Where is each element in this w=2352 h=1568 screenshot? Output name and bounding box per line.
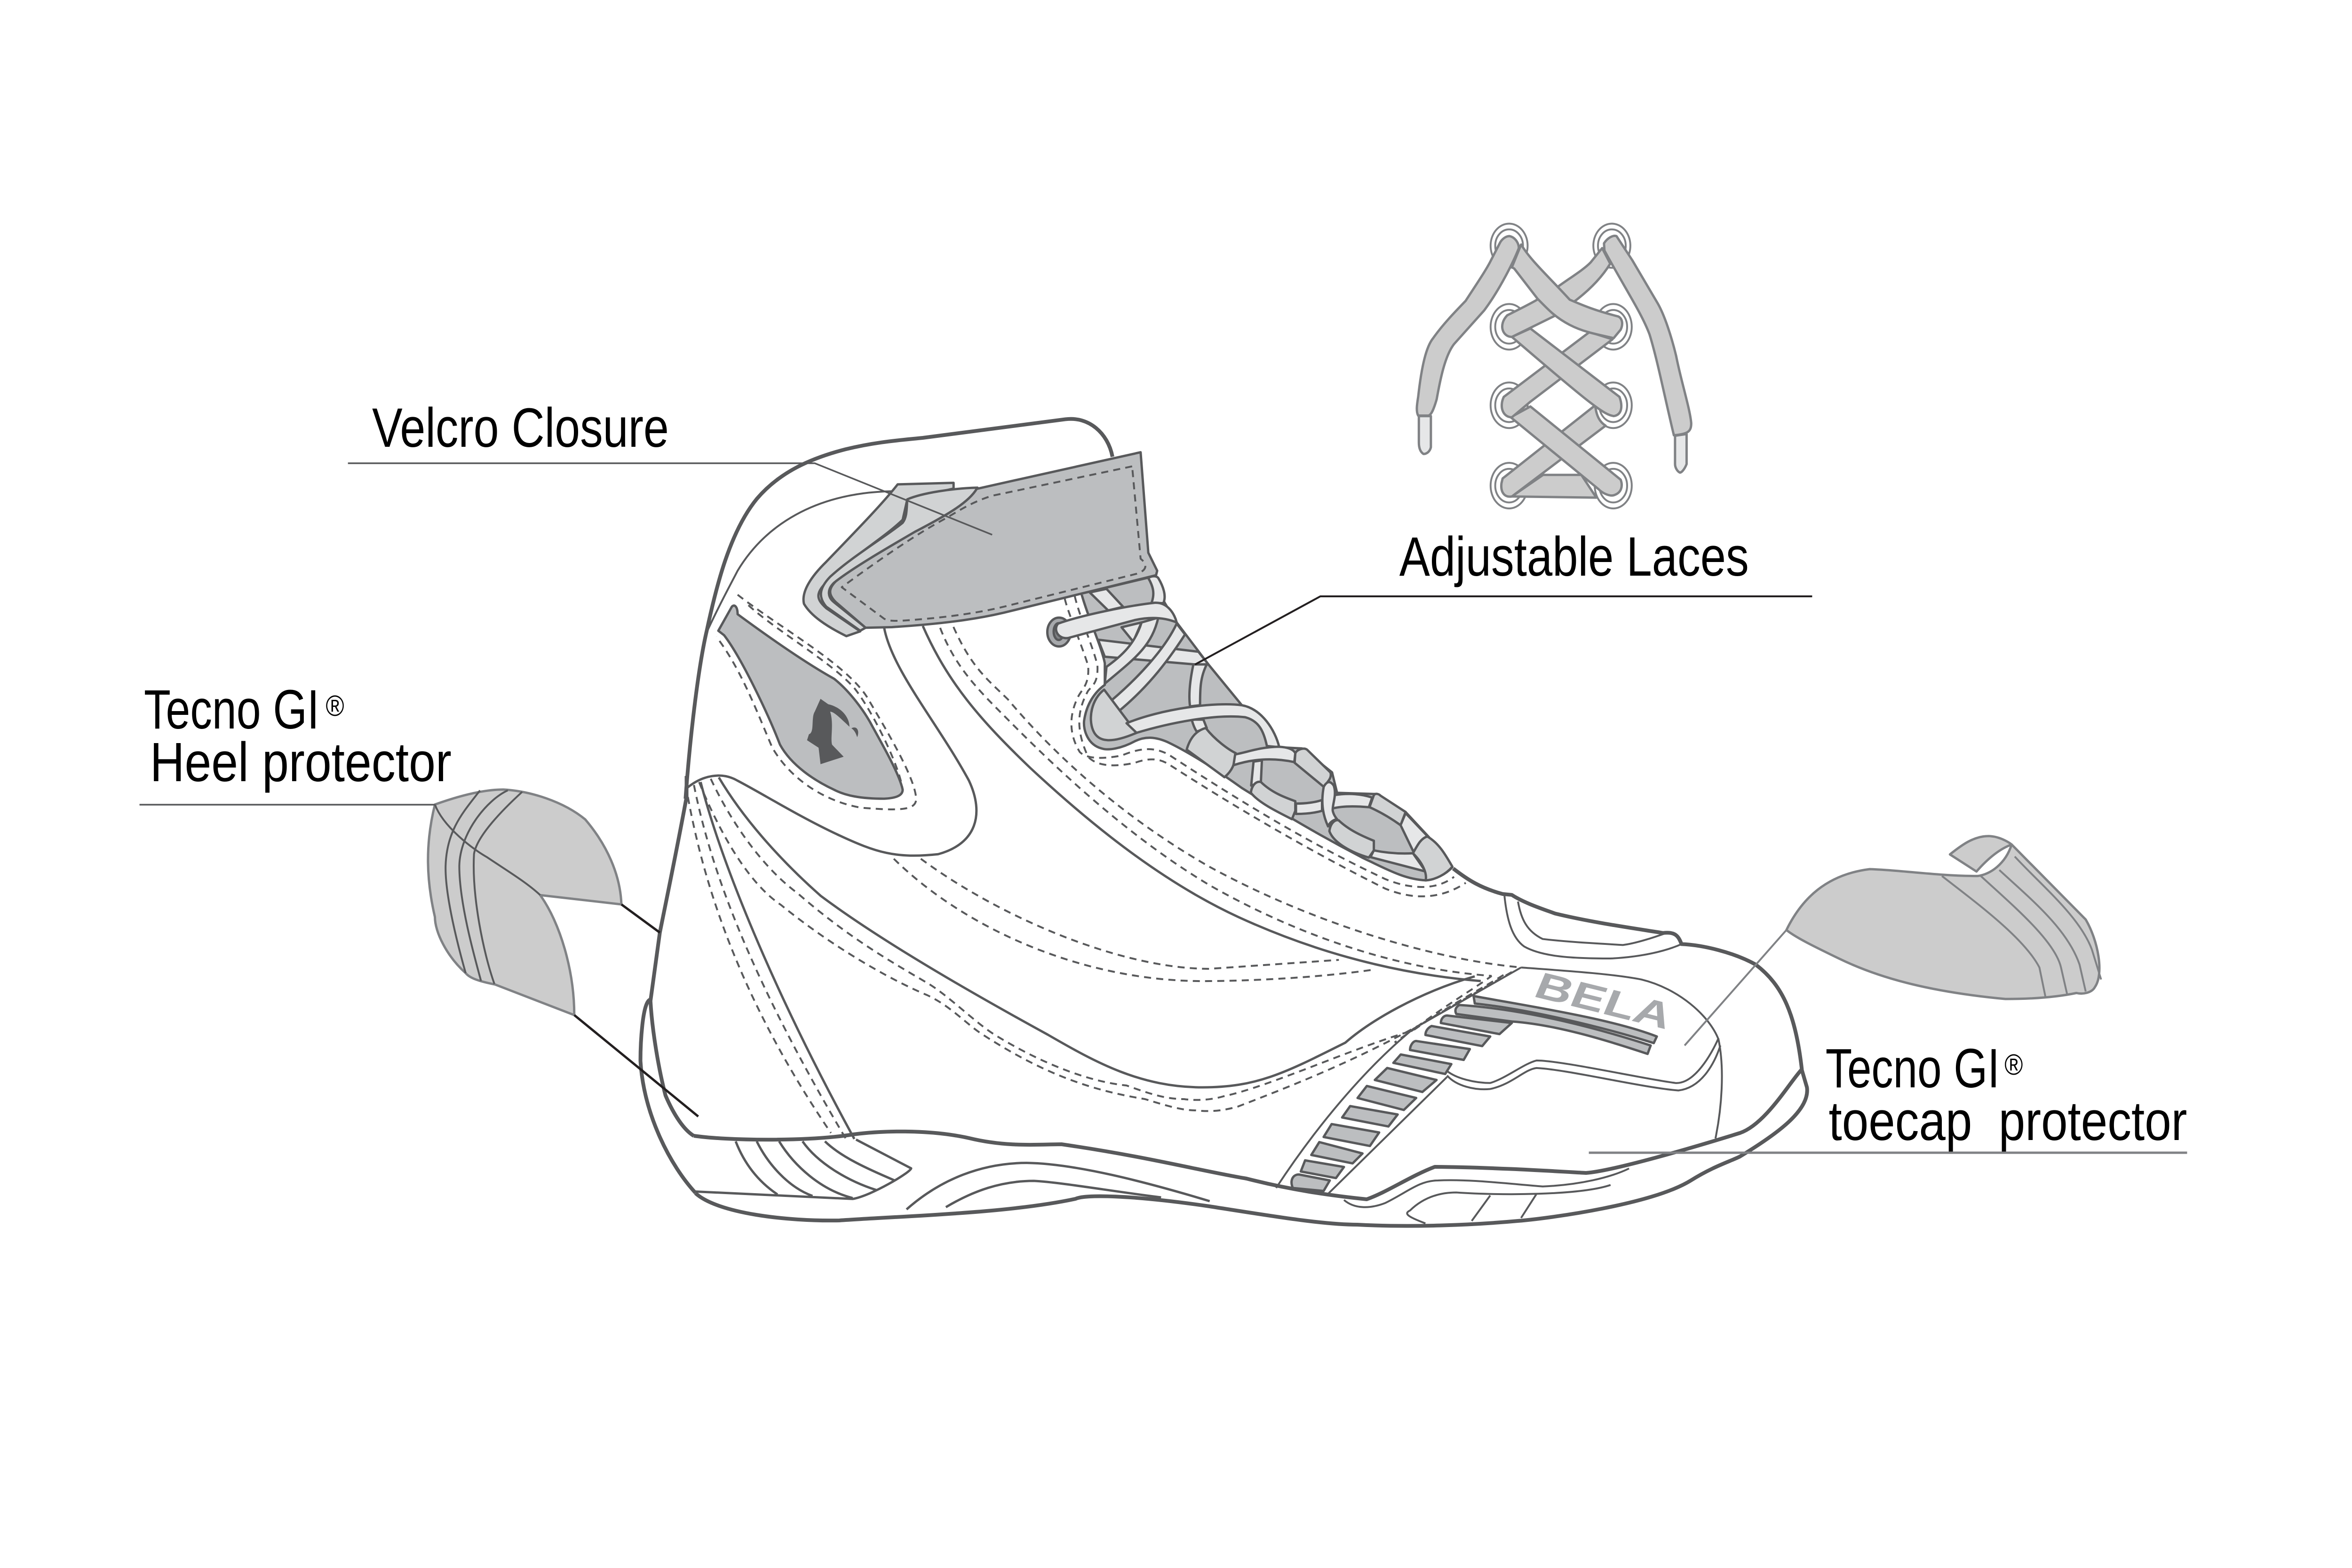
panel: velcro strap <box>830 452 1157 628</box>
label: Tecno GI heel: Tecno GI <box>144 679 319 741</box>
toe section <box>1276 869 1802 1223</box>
adjustable laces illustration <box>1417 224 1691 508</box>
callout line: adjustable laces <box>1195 596 1812 665</box>
callout line: velcro closure <box>348 463 992 535</box>
callout line: toecap protector <box>1589 1151 2187 1154</box>
label: Tecno GI toecap: Tecno GI <box>1826 1038 2000 1100</box>
shoe upper: collar and ankle panel <box>685 419 1157 855</box>
laces on shoe <box>1047 576 1453 880</box>
label: Velcro Closure: Velcro Closure <box>372 397 669 459</box>
heel protector illustration <box>428 790 698 1117</box>
label: Adjustable Laces: Adjustable Laces <box>1399 526 1749 588</box>
sole outline <box>694 1069 1807 1226</box>
callout line: heel protector <box>140 804 435 806</box>
lace strands <box>1417 236 1691 498</box>
callout lines: heel to shoe <box>574 904 698 1117</box>
shoe side seams and stitching <box>699 626 1521 1111</box>
label: toecap protector: toecap protector <box>1829 1091 2187 1152</box>
label: Tecno GI toecap: ® <box>2004 1049 2023 1081</box>
brand logo: BELA <box>1529 965 1679 1037</box>
shoe illustration <box>640 419 1807 1226</box>
toecap protector illustration <box>1685 836 2101 1045</box>
heel section <box>640 776 911 1199</box>
sole arch lines <box>906 1163 1210 1210</box>
callout line: toecap to shoe <box>1685 930 1787 1045</box>
label: Heel protector: Heel protector <box>150 732 452 793</box>
label: Tecno GI heel: ® <box>326 690 344 722</box>
lace area on shoe <box>1047 576 1466 896</box>
toe ribs <box>1292 996 1657 1191</box>
panel: lace opening <box>1081 577 1453 880</box>
icon: velcro strap flap <box>803 483 977 636</box>
eyelets <box>1491 224 1632 508</box>
panel: mascot patch <box>718 606 903 799</box>
